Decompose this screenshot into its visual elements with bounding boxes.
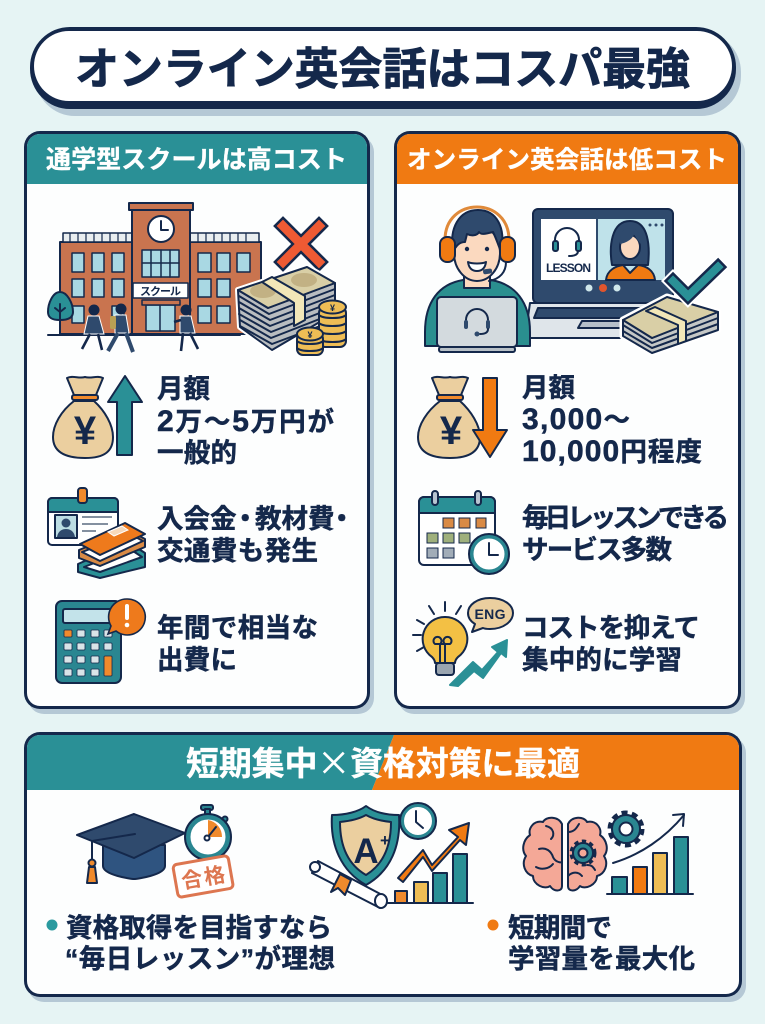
icon: coin stacks: ¥ <box>307 330 313 340</box>
icon: passing stamp <box>173 855 234 898</box>
text: annual expense: 出費に <box>157 645 237 675</box>
icon: passing stamp: 合格 <box>180 863 227 894</box>
panel: online low cost <box>394 131 745 714</box>
icon: money bag with up arrow <box>53 376 142 458</box>
text: monthly fee school: 月額 <box>157 374 210 404</box>
icon: graduation cap with stopwatch <box>77 805 231 883</box>
text: extra fees: 入会金・教材費・ <box>157 504 355 534</box>
text: monthly fee online: 10,000円程度 <box>522 435 702 468</box>
icon: laptop with video lesson <box>525 209 673 338</box>
icon: cash and check <box>623 267 718 353</box>
text: study volume bullet: 短期間で <box>508 913 612 943</box>
icon: coin stacks: ¥ <box>330 303 335 313</box>
text: certification bullet <box>46 913 335 974</box>
icon: calendar with clock <box>419 491 509 574</box>
chart: gear and rising bars <box>607 814 693 894</box>
icon: red cross <box>283 226 319 262</box>
icon: money bag with down arrow <box>418 377 507 458</box>
text: monthly fee online: 3,000〜 <box>522 403 630 436</box>
text: daily lessons: 毎日レッスンできる <box>522 503 729 533</box>
title: オンライン英会話はコスパ最強 <box>75 45 690 94</box>
icon: school building <box>48 203 261 335</box>
icon: person with headset <box>425 207 530 352</box>
text: extra fees: 交通費も発生 <box>157 536 318 566</box>
panel: short-term certification <box>24 732 746 1002</box>
icon: coin stacks <box>297 300 346 355</box>
icon: id card and books <box>48 488 145 578</box>
header: online <box>397 134 738 184</box>
text: annual expense <box>157 613 318 675</box>
icon: students walking <box>82 304 198 352</box>
text: certification bullet: 資格取得を目指すなら <box>66 913 332 943</box>
text: daily lessons <box>522 503 729 565</box>
text: extra fees <box>157 504 355 566</box>
icon: calculator with alert <box>56 599 145 683</box>
text: focused study <box>522 613 700 675</box>
panel: school high cost <box>24 131 374 714</box>
text: certification bullet: “毎日レッスン”が理想 <box>65 944 335 974</box>
chart: rising bars with orange arrow <box>388 823 473 903</box>
icon: shield with diploma: + <box>380 831 390 850</box>
header: online: オンライン英会話は低コスト <box>407 146 727 174</box>
icon: shield with diploma <box>310 803 436 908</box>
text: daily lessons: サービス多数 <box>522 535 672 565</box>
icon: light bulb, speech bubble and rising arrow <box>413 598 513 686</box>
text: study volume bullet: 学習量を最大化 <box>508 944 695 974</box>
text: monthly fee online: 月額 <box>522 373 576 403</box>
header: school <box>27 134 367 184</box>
text: monthly fee school <box>157 374 334 468</box>
text: focused study: コストを抑えて <box>522 613 700 643</box>
icon: money bag with up arrow: ¥ <box>74 409 97 453</box>
header: school: 通学型スクールは高コスト <box>46 146 347 174</box>
icon: brain with gears <box>523 818 607 890</box>
text: annual expense: 年間で相当な <box>157 613 318 643</box>
text: monthly fee school: 一般的 <box>157 438 237 468</box>
text: monthly fee school: 2万〜5万円が <box>157 405 334 438</box>
header: short-term: 短期集中×資格対策に最適 <box>186 737 580 785</box>
icon: shield with diploma: A <box>353 832 379 871</box>
icon: cash stack <box>238 267 335 350</box>
title <box>30 27 741 116</box>
header: short-term <box>27 735 739 790</box>
icon: light bulb, speech bubble and rising arrow: ENG <box>474 606 506 622</box>
icon: money bag with down arrow: ¥ <box>440 409 463 453</box>
icon: school building: スクール <box>140 285 181 298</box>
text: focused study: 集中的に学習 <box>522 645 682 675</box>
text: monthly fee online <box>522 373 702 468</box>
text: study volume bullet <box>488 913 695 974</box>
icon: laptop with video lesson: LESSON <box>546 261 591 275</box>
